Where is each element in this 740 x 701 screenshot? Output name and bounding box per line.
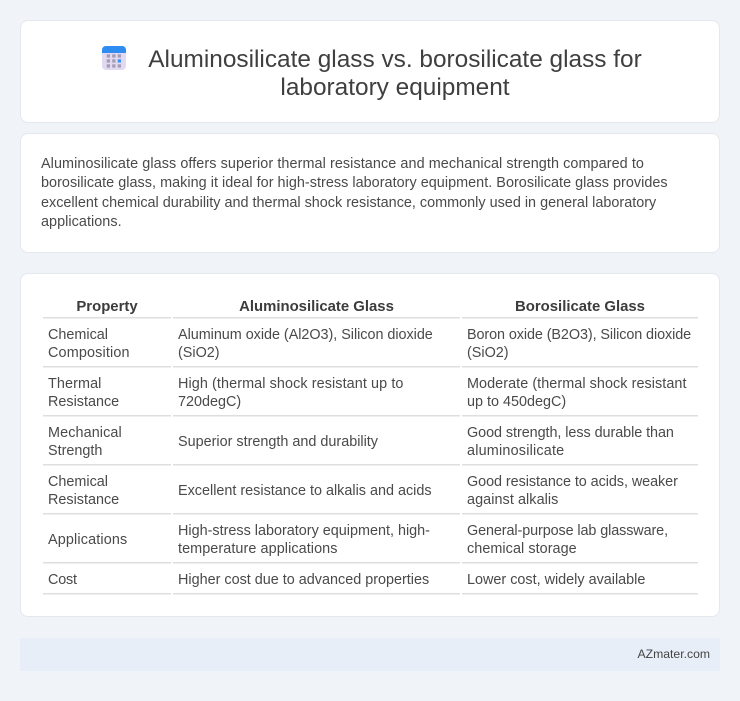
row: chemical composition: (SiO2) <box>467 345 509 361</box>
title: Aluminosilicate glass vs. borosilicate glass for <box>148 46 642 73</box>
row: chemical composition: Boron oxide (B2O3), Silicon dioxide <box>467 327 691 343</box>
row: chemical resistance: Good resistance to acids, weaker <box>467 474 678 490</box>
row: chemical composition: Composition <box>48 345 130 361</box>
row: mechanical strength: Superior strength and durability <box>178 434 378 450</box>
summary text <box>41 156 668 230</box>
row: thermal resistance: High (thermal shock resistant up to <box>178 376 404 392</box>
title: laboratory equipment <box>280 74 510 101</box>
row: cost: Lower cost, widely available <box>467 572 645 588</box>
row: chemical composition <box>43 327 698 368</box>
footer bar <box>20 638 720 671</box>
row: applications: Applications <box>48 532 127 548</box>
row: thermal resistance <box>43 376 698 417</box>
table header: Aluminosilicate Glass <box>239 299 394 315</box>
title <box>148 46 642 101</box>
summary text: applications. <box>41 214 122 230</box>
row: cost: Cost <box>48 572 77 588</box>
icon: calendar grid <box>102 46 126 70</box>
row: thermal resistance: Thermal <box>48 376 101 392</box>
row: thermal resistance: up to 450degC) <box>467 394 566 410</box>
row: chemical resistance: against alkalis <box>467 492 558 508</box>
row: mechanical strength: Strength <box>48 443 102 459</box>
row: chemical composition: Chemical <box>48 327 108 343</box>
row: mechanical strength: Good strength, less durable than <box>467 425 674 441</box>
panel: summary card <box>20 133 720 253</box>
row: chemical composition: (SiO2) <box>178 345 220 361</box>
row: cost <box>43 572 698 595</box>
row: mechanical strength <box>43 425 698 466</box>
footer brand: AZmater.com <box>638 647 710 661</box>
row: applications: temperature applications <box>178 541 338 557</box>
panel: title card <box>20 20 720 123</box>
summary text: excellent chemical durability and thermal shock resistance, commonly used in general laboratory <box>41 195 656 211</box>
row: chemical composition: Aluminum oxide (Al2O3), Silicon dioxide <box>178 327 433 343</box>
row: thermal resistance: Moderate (thermal shock resistant <box>467 376 687 392</box>
summary text: Aluminosilicate glass offers superior thermal resistance and mechanical strength compared to <box>41 156 644 172</box>
row: applications: chemical storage <box>467 541 577 557</box>
table header <box>43 299 698 319</box>
row: applications: High-stress laboratory equipment, high- <box>178 523 430 539</box>
summary text: borosilicate glass, making it ideal for high-stress laboratory equipment. Borosilicate glass provides <box>41 175 668 191</box>
row: thermal resistance: Resistance <box>48 394 119 410</box>
row: applications: General-purpose lab glassware, <box>467 523 668 539</box>
row: cost: Higher cost due to advanced properties <box>178 572 429 588</box>
table header: Property <box>76 299 138 315</box>
row: chemical resistance: Resistance <box>48 492 119 508</box>
row: mechanical strength: Mechanical <box>48 425 122 441</box>
panel: comparison table card <box>20 273 720 617</box>
row: chemical resistance: Excellent resistance to alkalis and acids <box>178 483 432 499</box>
comparison table <box>43 299 698 595</box>
row: chemical resistance: Chemical <box>48 474 108 490</box>
row: applications <box>43 523 698 564</box>
row: mechanical strength: aluminosilicate <box>467 443 564 459</box>
row: thermal resistance: 720degC) <box>178 394 241 410</box>
table header: Borosilicate Glass <box>515 299 645 315</box>
row: chemical resistance <box>43 474 698 515</box>
